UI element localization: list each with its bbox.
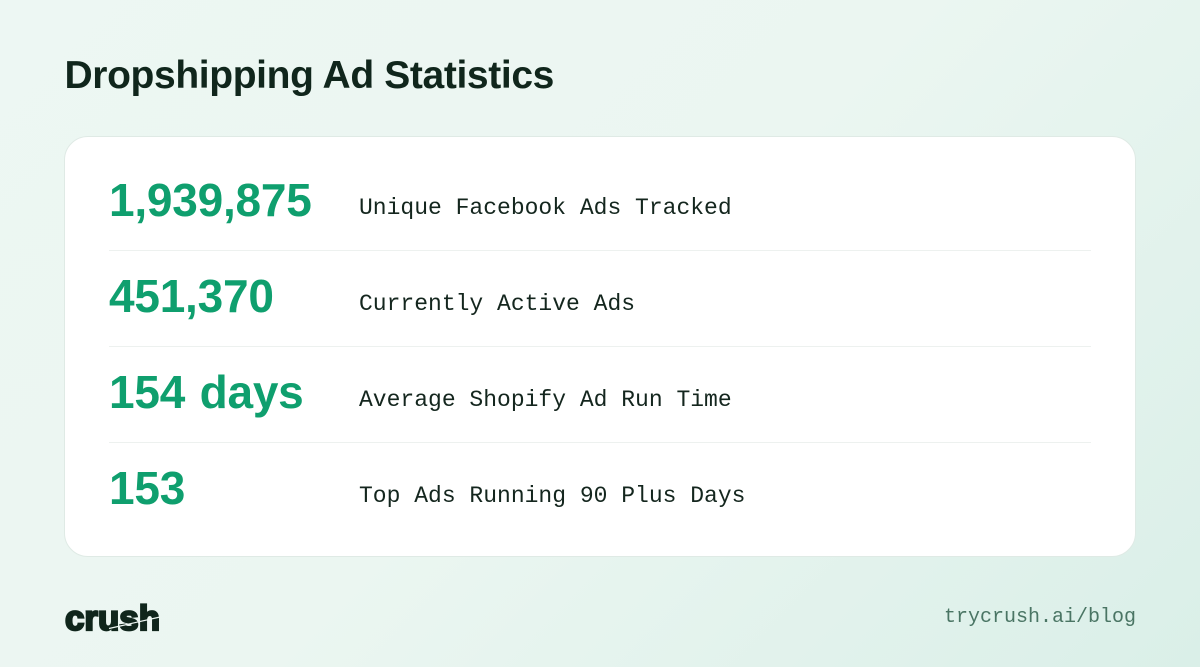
description: Top Ads Running 90 Plus Days	[359, 483, 745, 509]
stat row: active ads	[109, 270, 635, 322]
number: 1,939,875	[109, 174, 312, 226]
source url: trycrush.ai/blog	[944, 606, 1136, 629]
stat row: average run time	[109, 366, 732, 418]
number: 153	[109, 462, 185, 514]
stat row: unique Facebook ads	[109, 174, 732, 226]
panel: statistics card	[64, 136, 1136, 557]
stat row: top ads running 90 plus days	[109, 462, 745, 514]
description: Unique Facebook Ads Tracked	[359, 195, 732, 221]
number: 154 days	[109, 366, 304, 418]
description: Currently Active Ads	[359, 291, 635, 317]
description: Average Shopify Ad Run Time	[359, 387, 732, 413]
title: Dropshipping Ad Statistics	[64, 54, 554, 97]
number: 451,370	[109, 270, 274, 322]
